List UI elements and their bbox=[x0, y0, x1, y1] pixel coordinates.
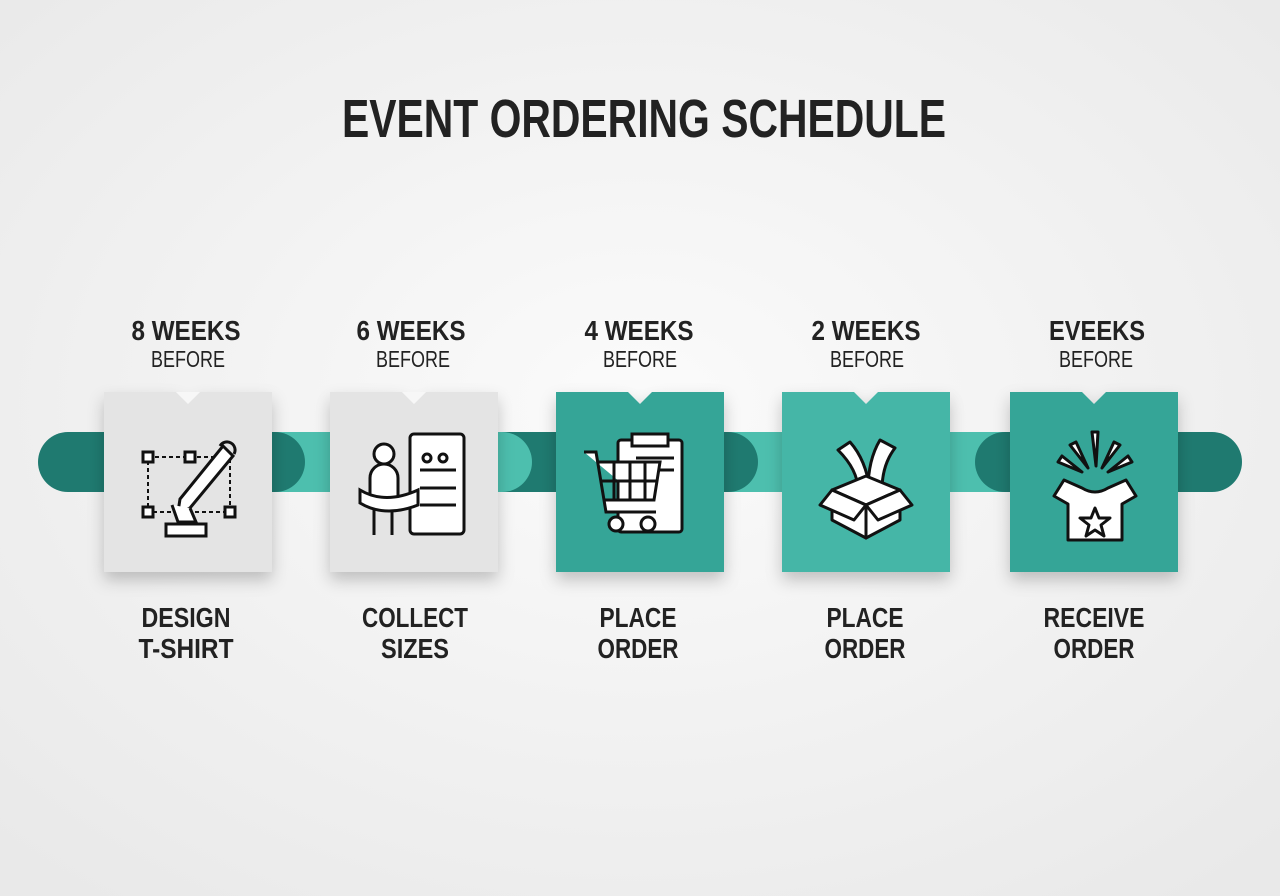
step 2: 6 weeks: 6 WEEKS bbox=[356, 315, 466, 346]
step 1: 8 weeks: BEFORE bbox=[151, 346, 225, 372]
icon: collect sizes bbox=[360, 434, 464, 535]
step 1: 8 weeks bbox=[104, 315, 272, 664]
step 4: 2 weeks: ORDER bbox=[824, 633, 906, 664]
step 5: eveeks: ORDER bbox=[1054, 633, 1134, 664]
step 3: 4 weeks: ORDER bbox=[598, 633, 678, 664]
step 5: eveeks: EVEEKS bbox=[1049, 315, 1145, 346]
step 1: 8 weeks: T-SHIRT bbox=[138, 633, 234, 664]
step 2: 6 weeks bbox=[330, 315, 498, 664]
step 5: eveeks: BEFORE bbox=[1059, 346, 1133, 372]
step 3: 4 weeks: BEFORE bbox=[603, 346, 677, 372]
step 4: 2 weeks: PLACE bbox=[826, 602, 904, 633]
step 4: 2 weeks: 2 WEEKS bbox=[812, 315, 920, 346]
step 4: 2 weeks: BEFORE bbox=[830, 346, 904, 372]
title: EVENT ORDERING SCHEDULE bbox=[342, 89, 946, 149]
step 2: 6 weeks: SIZES bbox=[381, 633, 449, 664]
icon: design pencil bbox=[143, 442, 235, 536]
step 2: 6 weeks: BEFORE bbox=[376, 346, 450, 372]
timeline bar bbox=[38, 432, 1242, 492]
step 1: 8 weeks: DESIGN bbox=[142, 602, 230, 633]
step 2: 6 weeks: COLLECT bbox=[362, 602, 468, 633]
step 4: 2 weeks bbox=[782, 315, 950, 664]
step 3: 4 weeks: 4 WEEKS bbox=[584, 315, 694, 346]
step 5: eveeks bbox=[1010, 315, 1178, 664]
step 3: 4 weeks: PLACE bbox=[600, 602, 676, 633]
icon: cart and clipboard bbox=[584, 434, 682, 532]
icon: open box bbox=[820, 440, 912, 538]
step 1: 8 weeks: 8 WEEKS bbox=[132, 315, 240, 346]
step 5: eveeks: RECEIVE bbox=[1044, 602, 1144, 633]
step 3: 4 weeks bbox=[556, 315, 724, 664]
icon: t-shirt with star bbox=[1054, 432, 1136, 540]
